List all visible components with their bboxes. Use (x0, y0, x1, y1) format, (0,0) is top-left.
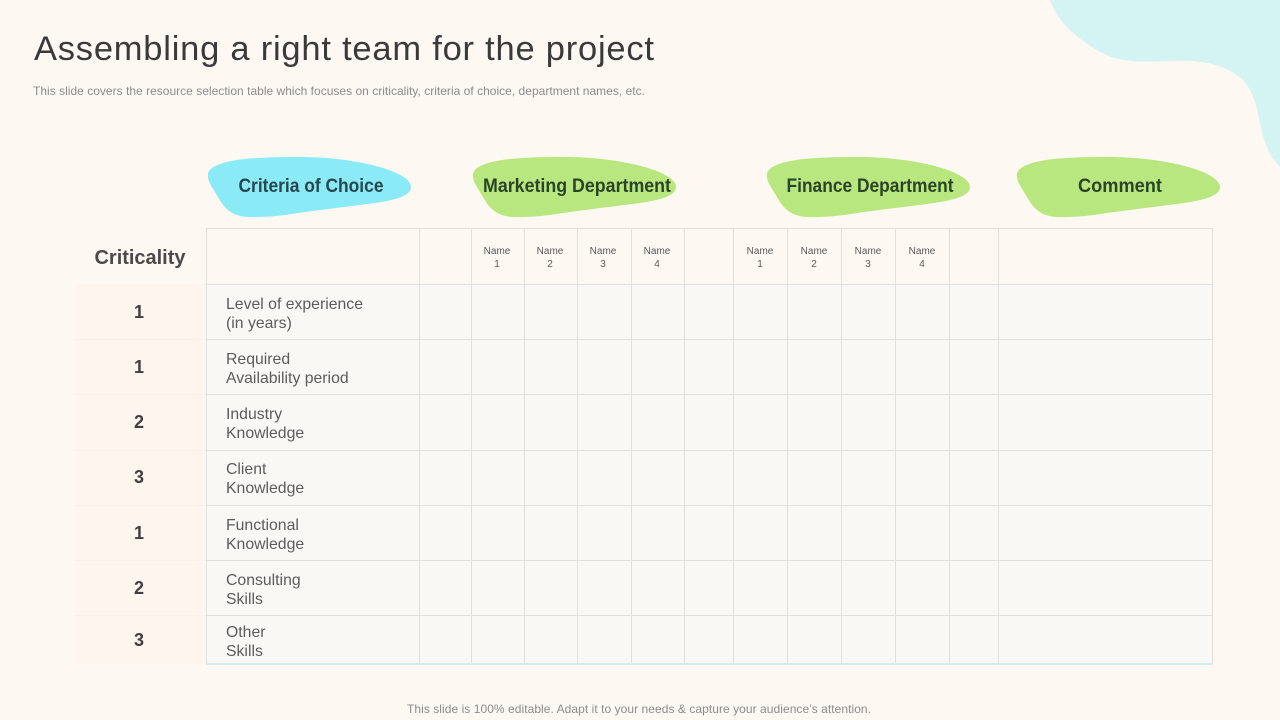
criticality values: 2 (134, 578, 144, 598)
criteria labels: Knowledge (226, 425, 304, 442)
header: Criteria of Choice: Criteria of Choice (238, 176, 384, 197)
column names: finance: 1 (757, 259, 763, 270)
criteria labels: Consulting (226, 572, 301, 589)
criteria labels: Knowledge (226, 480, 304, 497)
column names: marketing: Name (644, 246, 671, 257)
header: Marketing Department (473, 157, 676, 217)
column names: marketing: Name (537, 246, 564, 257)
column names: marketing: Name (484, 246, 511, 257)
header: Criteria of Choice (208, 157, 411, 217)
criteria labels: Other (226, 624, 266, 641)
column names: finance: 2 (811, 259, 817, 270)
header: Finance Department: Finance Department (786, 176, 954, 197)
criticality values (134, 302, 144, 650)
criteria labels: Availability period (226, 370, 349, 387)
column names: marketing: 2 (547, 259, 553, 270)
column names: finance: 3 (865, 259, 871, 270)
column names: finance (747, 246, 936, 270)
column names: finance: Name (855, 246, 882, 257)
criteria labels: (in years) (226, 315, 292, 332)
criticality values: 1 (134, 302, 144, 322)
criteria labels: Industry (226, 406, 282, 423)
criticality values: 3 (134, 630, 144, 650)
criteria labels: Functional (226, 517, 299, 534)
column names: finance: Name (801, 246, 828, 257)
column names: marketing: 3 (600, 259, 606, 270)
column names: marketing: 4 (654, 259, 660, 270)
header: Finance Department (767, 157, 970, 217)
header: Comment (1017, 157, 1220, 217)
criticality column shading (75, 284, 206, 664)
criteria labels: Level of experience (226, 296, 363, 313)
header: Comment: Comment (1078, 176, 1163, 197)
criticality values: 1 (134, 523, 144, 543)
column names: marketing (484, 246, 671, 270)
column names: finance: Name (909, 246, 936, 257)
criteria labels (226, 296, 363, 660)
subtitle: This slide covers the resource selection table which focuses on criticality, criteria of choice, department names, etc. (33, 84, 645, 98)
column names: finance: Name (747, 246, 774, 257)
decorative corner blob (1050, 0, 1280, 167)
criticality heading: Criticality (94, 247, 186, 269)
criticality values: 1 (134, 357, 144, 377)
criteria labels: Client (226, 461, 267, 478)
criteria labels: Knowledge (226, 536, 304, 553)
title: Assembling a right team for the project (34, 30, 654, 68)
column names: marketing: 1 (494, 259, 500, 270)
column names: finance: 4 (919, 259, 925, 270)
column names: marketing: Name (590, 246, 617, 257)
criteria labels: Skills (226, 643, 263, 660)
header: Marketing Department: Marketing Department (483, 176, 672, 197)
criteria labels: Required (226, 351, 290, 368)
table grid (206, 228, 1213, 664)
criteria labels: Skills (226, 591, 263, 608)
criticality values: 2 (134, 412, 144, 432)
footer note: This slide is 100% editable. Adapt it to your needs & capture your audience’s attention. (407, 702, 871, 716)
criticality values: 3 (134, 467, 144, 487)
